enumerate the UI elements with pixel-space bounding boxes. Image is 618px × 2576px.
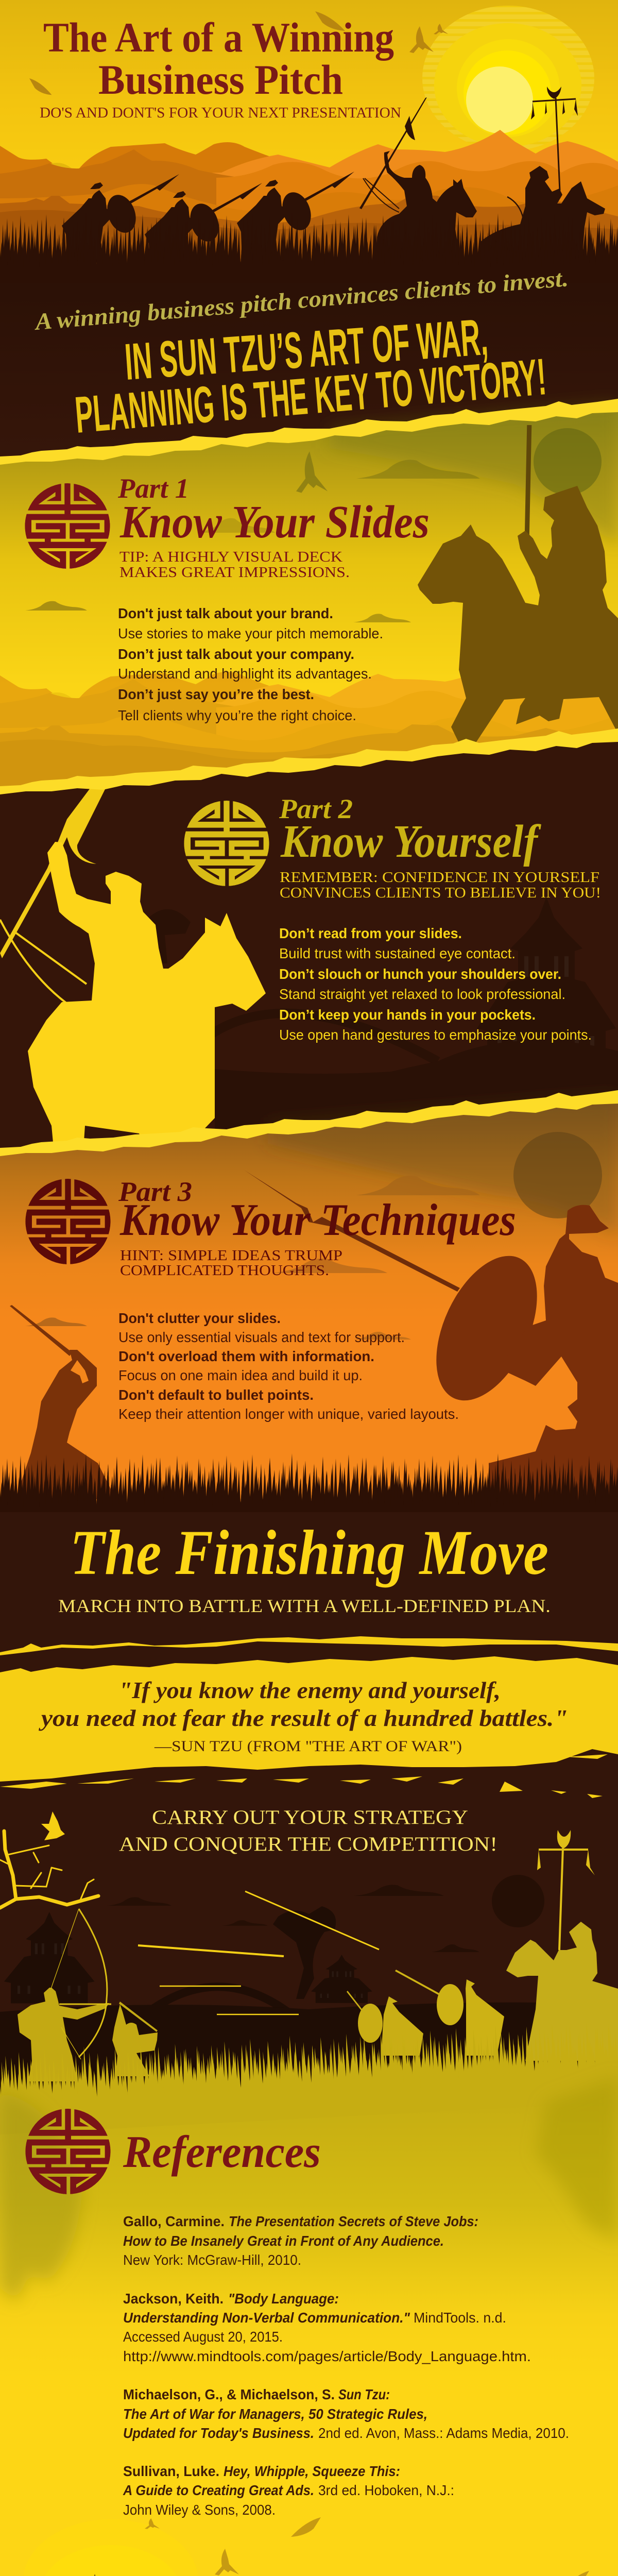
body text: Use open hand gestures to emphasize your points. — [279, 1027, 592, 1043]
body text: Keep their attention longer with unique, varied layouts. — [118, 1406, 459, 1422]
reference: Jackson: "Body Language: — [228, 2291, 339, 2307]
reference: Michaelson: Updated for Today's Business. — [123, 2425, 314, 2441]
bow — [0, 920, 87, 1007]
reference: Sullivan: A Guide to Creating Great Ads. — [123, 2482, 314, 2498]
reference: Jackson: Understanding Non-Verbal Communication." — [123, 2310, 410, 2326]
mountains — [0, 130, 618, 268]
reference: Jackson — [123, 2291, 531, 2364]
body text: Don’t keep your hands in your pockets. — [279, 1007, 536, 1023]
reference: Michaelson: The Art of War for Managers, 50 Strategic Rules, — [123, 2406, 427, 2422]
soldier three — [237, 172, 354, 260]
torn edge — [0, 728, 618, 794]
archer — [18, 1909, 111, 2081]
icon: raven — [41, 1811, 65, 1840]
spear — [244, 1170, 460, 1292]
background — [0, 403, 618, 796]
spear — [525, 425, 531, 541]
soldier one — [62, 174, 179, 263]
icon: feather — [315, 11, 345, 31]
hint: COMPLICATED THOUGHTS. — [120, 1262, 329, 1279]
cloud — [25, 601, 87, 611]
rider with standard — [506, 1830, 618, 2061]
cloud — [432, 1944, 479, 1952]
horse and rider silhouette — [418, 486, 618, 747]
body text: Use stories to make your pitch memorable. — [118, 625, 383, 641]
body text: Don’t just talk about your company. — [118, 646, 354, 662]
flag bearer — [41, 2574, 168, 2576]
stain left — [0, 2092, 82, 2303]
cavalry rider with glaive — [359, 97, 477, 263]
branch tree — [0, 1831, 98, 1908]
body text: Tell clients why you’re the right choice. — [118, 707, 356, 723]
warrior silhouette — [489, 1205, 618, 1525]
body text: Understand and highlight its advantages. — [118, 666, 372, 682]
icon: longevity emblem — [25, 1179, 111, 1264]
dark ground — [0, 283, 618, 464]
attribution: —SUN TZU (FROM "THE ART OF WAR") — [154, 1738, 462, 1755]
stain right — [536, 2076, 618, 2241]
pagoda — [477, 897, 616, 1070]
reference: Sullivan — [123, 2463, 454, 2518]
body text: Don’t read from your slides. — [279, 925, 462, 941]
stain — [268, 1095, 618, 1236]
icon: longevity emblem — [25, 2109, 111, 2194]
reference: Sullivan: Sullivan, Luke. — [123, 2463, 219, 2479]
icon: eagle — [296, 451, 328, 493]
panel: the finishing move — [0, 1512, 618, 2079]
cloud behind heading — [197, 518, 275, 533]
body text: Don’t slouch or hunch your shoulders over. — [279, 966, 561, 982]
part label: Part 2 — [279, 793, 353, 824]
cloud — [353, 614, 411, 622]
body text: Don't just talk about your brand. — [118, 605, 333, 621]
cloud — [353, 1885, 444, 1896]
torn edge — [0, 1090, 618, 1156]
grass — [0, 2008, 618, 2145]
spearman — [112, 2002, 158, 2076]
soldier two — [145, 183, 262, 272]
tower — [311, 1955, 372, 2003]
stain — [330, 402, 618, 546]
bridge — [130, 1987, 304, 2027]
closing line: CARRY OUT YOUR STRATEGY — [152, 1806, 468, 1828]
heading: Know Your Techniques — [119, 1195, 516, 1245]
icon: eagle — [215, 2549, 239, 2575]
panel: conquer scene — [0, 1806, 618, 2112]
quote — [39, 1677, 568, 1731]
icon: small feather — [29, 78, 52, 95]
reference: Sullivan: Hey, Whipple, Squeeze This: — [224, 2463, 400, 2479]
moon — [492, 1875, 544, 1927]
moon — [534, 428, 602, 495]
reference: Michaelson — [123, 2386, 569, 2441]
body text: Build trust with sustained eye contact. — [279, 945, 516, 961]
panel: hero — [0, 0, 618, 464]
icon: longevity emblem — [25, 483, 110, 569]
closing line — [119, 1806, 497, 1855]
quote: "If you know the enemy and yourself, — [118, 1677, 501, 1703]
body text: Don’t just say you’re the best. — [118, 686, 314, 702]
grass — [0, 1453, 618, 1537]
hint — [120, 1247, 342, 1279]
panel: part 1 know your slides — [0, 399, 618, 798]
tip: MAKES GREAT IMPRESSIONS. — [119, 564, 350, 581]
background — [0, 734, 618, 1157]
cloud — [107, 1897, 171, 1906]
title — [43, 14, 394, 103]
reference: Gallo: New York: McGraw-Hill, 2010. — [123, 2252, 301, 2268]
icon: feather — [291, 2517, 321, 2537]
hint: HINT: SIMPLE IDEAS TRUMP — [120, 1247, 342, 1264]
reminder: REMEMBER: CONFIDENCE IN YOURSELF — [280, 869, 599, 886]
dark hill — [0, 2003, 618, 2112]
heading: The Finishing Move — [70, 1517, 548, 1588]
right soldier one — [347, 1991, 423, 2056]
cloud — [222, 1920, 268, 1926]
background — [0, 1096, 618, 1520]
icon: small bird — [145, 2518, 160, 2529]
tip: TIP: A HIGHLY VISUAL DECK — [119, 549, 342, 565]
body text: Use only essential visuals and text for support. — [118, 1329, 405, 1345]
cloud — [25, 1317, 87, 1326]
shield — [416, 1240, 558, 1416]
panel: part 2 know yourself — [0, 728, 618, 1164]
mountains — [0, 659, 618, 798]
grass — [0, 213, 618, 297]
body text — [118, 605, 383, 723]
part label: Part 1 — [117, 473, 189, 504]
brush stroke upper — [0, 1636, 618, 1655]
panel: part 3 know your techniques — [0, 1090, 618, 1537]
reminder — [280, 869, 601, 901]
background ground — [0, 2069, 618, 2576]
tip — [119, 549, 350, 581]
cloud — [272, 1259, 387, 1273]
reference: Gallo: How to Be Insanely Great in Front of Any Audience. — [123, 2233, 444, 2249]
closing line: AND CONQUER THE COMPETITION! — [119, 1833, 497, 1855]
body text: Don't default to bullet points. — [118, 1387, 314, 1403]
icon: small bird — [434, 24, 448, 35]
brush stroke quote band — [0, 1656, 618, 1782]
title: The Art of a Winning — [43, 14, 394, 61]
body text: Don't clutter your slides. — [118, 1310, 281, 1326]
right soldier two — [395, 1970, 504, 2056]
swordsman silhouette — [10, 1305, 116, 1499]
icon: longevity emblem — [184, 801, 269, 886]
reference: Gallo: The Presentation Secrets of Steve Jobs: — [229, 2213, 478, 2229]
icon: feather — [566, 2571, 589, 2576]
cavalry rider with standard — [480, 87, 605, 263]
reference: Michaelson: 2nd ed. Avon, Mass.: Adams Media, 2010. — [318, 2425, 569, 2441]
horse and rider silhouette — [28, 842, 266, 1164]
pagoda — [4, 1912, 95, 2004]
subheading: MARCH INTO BATTLE WITH A WELL-DEFINED PLAN. — [58, 1596, 551, 1616]
body text: Don't overload them with information. — [118, 1348, 374, 1364]
reference: Sullivan: John Wiley & Sons, 2008. — [123, 2502, 276, 2518]
reference: Michaelson: Sun Tzu: — [338, 2386, 390, 2402]
cloud — [356, 1176, 480, 1195]
body text: Stand straight yet relaxed to look professional. — [279, 986, 565, 1002]
heading: References — [123, 2127, 321, 2177]
sun — [23, 2519, 198, 2576]
sun — [422, 6, 594, 151]
body text — [279, 925, 592, 1043]
polearm — [0, 788, 106, 958]
background tree — [142, 909, 191, 963]
cloud — [356, 460, 480, 479]
reference: Michaelson: Michaelson, G., & Michaelson, S. — [123, 2386, 335, 2402]
body text — [118, 1310, 459, 1422]
flying spears — [138, 1891, 379, 2014]
icon: eagle — [409, 26, 434, 53]
panel: closing battlefield — [0, 2517, 618, 2576]
intro sentence: A winning business pitch convinces clients to invest. — [32, 265, 569, 335]
reference: Gallo: Gallo, Carmine. — [123, 2213, 225, 2229]
heading: Know Yourself — [280, 816, 541, 867]
body text: Focus on one main idea and build it up. — [118, 1367, 363, 1383]
background hill — [215, 1040, 618, 1154]
brush debris — [0, 1749, 608, 1798]
heading: Know Your Slides — [119, 497, 430, 548]
reference: Jackson: Accessed August 20, 2015. — [123, 2329, 283, 2345]
cloud — [353, 1332, 411, 1340]
reminder: CONVINCES CLIENTS TO BELIEVE IN YOU! — [280, 885, 601, 901]
panel: references — [0, 2008, 618, 2576]
moon — [513, 1132, 602, 1218]
part label: Part 3 — [118, 1176, 192, 1207]
sky background — [0, 0, 618, 268]
reference: Gallo — [123, 2213, 478, 2268]
reference: Jackson: Jackson, Keith. — [123, 2291, 224, 2307]
title: Business Pitch — [98, 56, 343, 103]
reference: Jackson: MindTools. n.d. — [414, 2310, 506, 2326]
reference: Jackson: http://www.mindtools.com/pages/article/Body_Language.htm. — [123, 2348, 531, 2364]
reference: Sullivan: 3rd ed. Hoboken, N.J.: — [318, 2482, 454, 2498]
tree — [273, 1906, 336, 1999]
bridge — [196, 1013, 438, 1061]
subtitle: DO'S AND DONT'S FOR YOUR NEXT PRESENTATION — [40, 105, 401, 121]
background — [0, 1512, 618, 2079]
torn edge — [0, 399, 618, 465]
quote: you need not fear the result of a hundred battles." — [39, 1705, 568, 1731]
